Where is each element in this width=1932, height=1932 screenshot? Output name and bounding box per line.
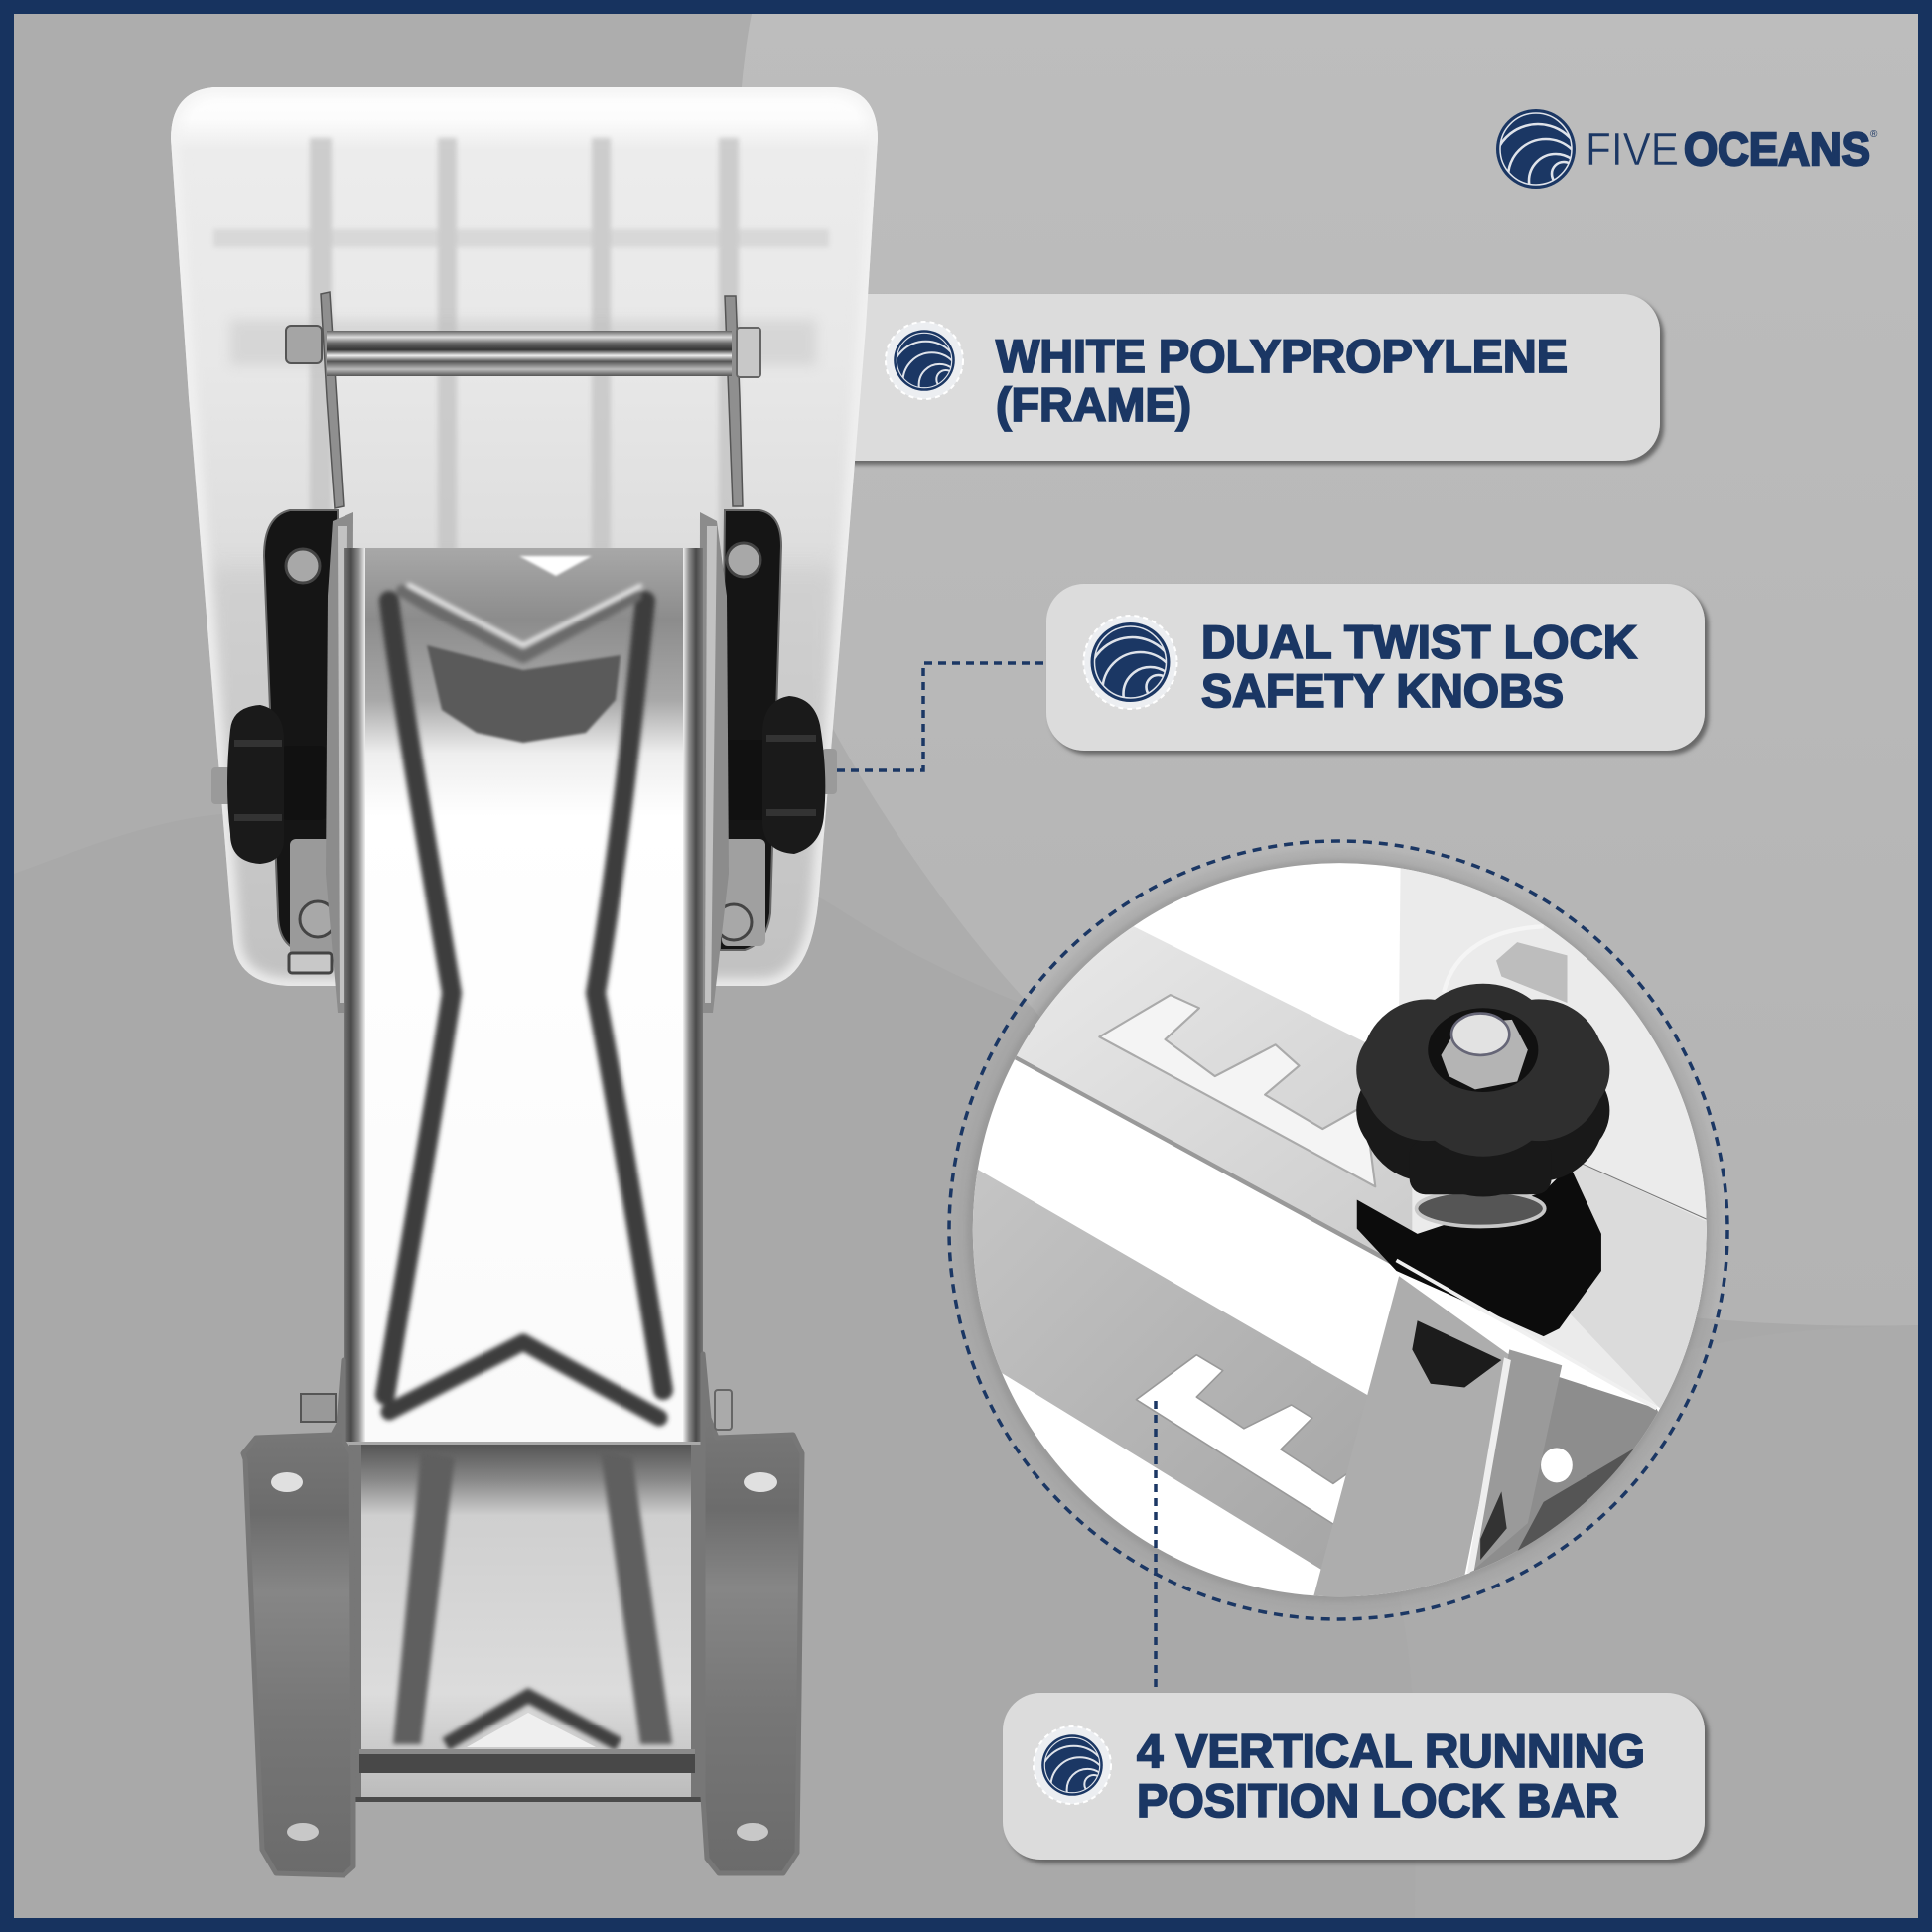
stainless channel xyxy=(344,548,703,1442)
callout text: 4 VERTICAL RUNNING xyxy=(1137,1725,1645,1777)
icon: waves badge xyxy=(1034,1726,1111,1816)
logo wordmark xyxy=(1586,123,1878,175)
logo xyxy=(1493,109,1878,214)
callout: dual twist lock xyxy=(1046,584,1705,751)
small hex nut xyxy=(1412,1320,1501,1388)
left mounting foot xyxy=(243,1360,353,1875)
icon: waves badge xyxy=(1084,616,1177,728)
left twist knob xyxy=(211,705,327,864)
black back plate, left xyxy=(264,510,338,957)
strut and lower plate xyxy=(1312,1276,1680,1602)
callout text: (FRAME) xyxy=(996,378,1191,431)
white polypropylene plate xyxy=(171,87,878,993)
lower channel xyxy=(349,1445,703,1802)
product: outboard motor bracket xyxy=(171,87,878,1875)
bolt head xyxy=(1496,942,1568,1003)
right twist knob xyxy=(725,696,837,854)
callout text: SAFETY KNOBS xyxy=(1201,664,1564,717)
callout text xyxy=(1137,1725,1645,1827)
callout text xyxy=(1201,616,1637,717)
dotted connector to knob xyxy=(837,663,1046,770)
mounting nuts xyxy=(286,543,760,973)
callout: lock bar xyxy=(1003,1693,1705,1860)
dotted connector to lock bar xyxy=(1154,1401,1158,1688)
stainless pin xyxy=(286,326,760,377)
black back plate, right xyxy=(720,510,781,950)
side flanges xyxy=(326,512,729,1013)
black knob xyxy=(1356,984,1609,1227)
side arms xyxy=(321,292,743,508)
top reflection xyxy=(427,645,621,743)
icon: waves badge xyxy=(886,322,963,411)
logo wordmark: OCEANS xyxy=(1684,123,1870,175)
callout text: DUAL TWIST LOCK xyxy=(1201,616,1637,668)
callout text xyxy=(996,330,1568,431)
zoomed detail circle xyxy=(947,839,1729,1621)
callout text: POSITION LOCK BAR xyxy=(1137,1774,1618,1827)
logo wordmark: FIVE xyxy=(1586,123,1679,175)
lower slotted bar xyxy=(973,1170,1368,1569)
knob reflection xyxy=(1357,1166,1601,1336)
logo wordmark: ® xyxy=(1870,129,1878,140)
callout: white polypropylene xyxy=(794,294,1660,461)
callout text: WHITE POLYPROPYLENE xyxy=(996,330,1568,382)
top slotted bar xyxy=(1015,927,1412,1265)
logo icon xyxy=(1493,109,1584,214)
right mounting foot xyxy=(703,1354,802,1873)
hourglass stamping xyxy=(385,585,663,1418)
